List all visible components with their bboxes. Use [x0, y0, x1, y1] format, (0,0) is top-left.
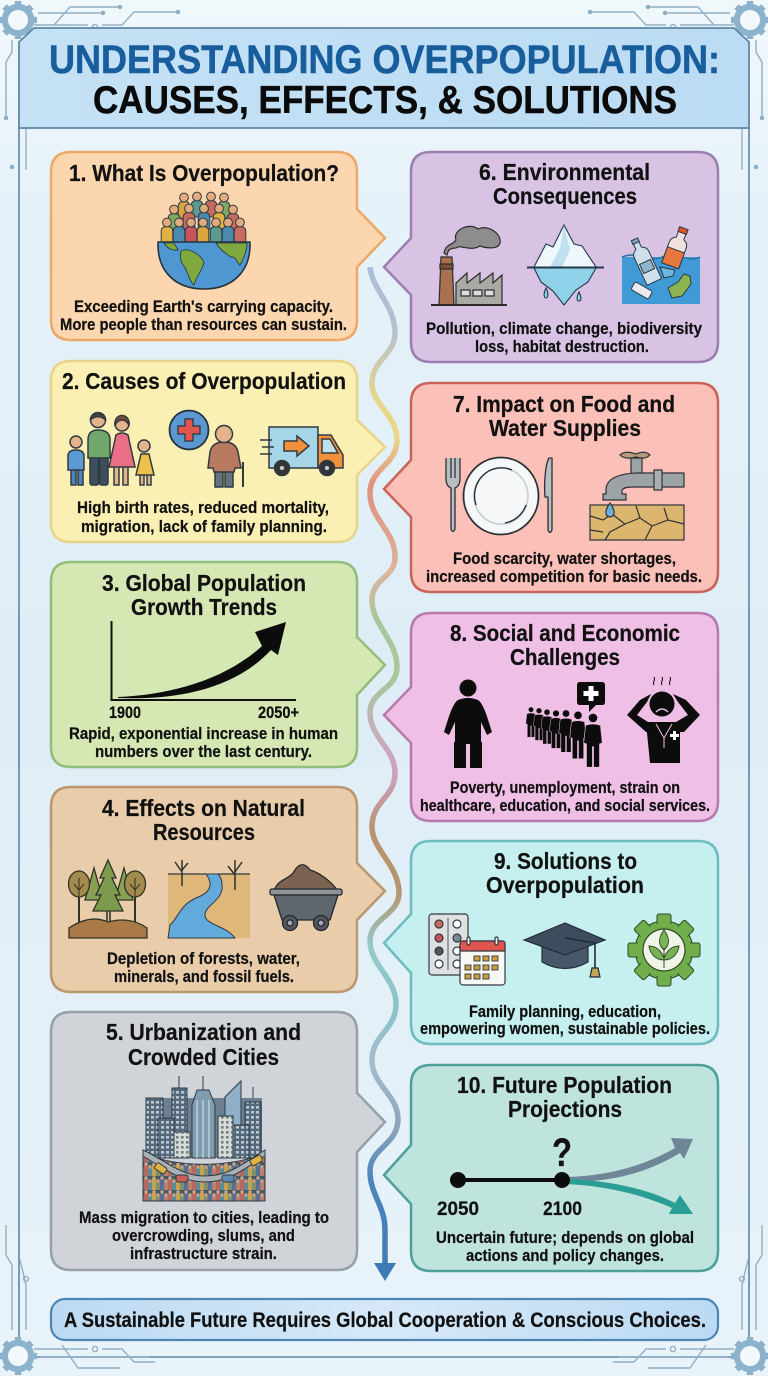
body text 3: Rapid, exponential increase in human [69, 724, 338, 743]
body text 7: increased competition for basic needs. [426, 567, 702, 586]
axis labels: 2050+ [258, 703, 299, 722]
heading 8: Challenges [510, 644, 620, 670]
heading 3 [102, 570, 306, 620]
title line 2: CAUSES, EFFECTS, & SOLUTIONS [93, 79, 677, 122]
body text 10: actions and policy changes. [466, 1246, 664, 1265]
body text 5: overcrowding, slums, and [112, 1226, 295, 1245]
body text 4: minerals, and fossil fuels. [114, 967, 294, 986]
timeline labels [437, 1199, 582, 1220]
heading 8 [450, 620, 680, 670]
panel 7: food and water [384, 383, 718, 592]
heading 4: 4. Effects on Natural [102, 795, 305, 821]
icon: fork, plate and knife [446, 458, 552, 534]
body text 10 [436, 1228, 694, 1265]
body text 9 [420, 1002, 710, 1038]
title banner [19, 28, 749, 128]
body text 7 [426, 549, 702, 586]
body text 10: Uncertain future; depends on global [436, 1228, 694, 1247]
timeline labels: 2100 [543, 1199, 582, 1220]
icon: crowded city [143, 1076, 265, 1201]
heading 8: 8. Social and Economic [450, 620, 680, 646]
icon: mine cart [270, 865, 342, 930]
body text 2 [77, 498, 329, 536]
body text 3: numbers over the last century. [95, 742, 312, 761]
heading 10 [457, 1072, 672, 1122]
heading 9: 9. Solutions to [494, 848, 637, 874]
panel 8: social and economic challenges [384, 613, 718, 821]
icon: crowd on globe [158, 192, 250, 289]
body text 5: infrastructure strain. [130, 1244, 277, 1263]
icon: stressed doctor [627, 677, 700, 763]
body text 6: loss, habitat destruction. [475, 337, 649, 356]
heading 2: 2. Causes of Overpopulation [62, 368, 346, 394]
icon: faucet over cracked ground [590, 452, 684, 540]
body text 4 [107, 949, 300, 986]
panel 2: causes [51, 361, 385, 542]
heading 9 [486, 848, 644, 898]
body text 1 [60, 297, 347, 334]
body text 3 [69, 724, 338, 761]
icon: forest [68, 860, 147, 938]
axis labels [109, 703, 299, 722]
panel 3: growth trends [51, 562, 385, 767]
icon: family [68, 412, 154, 485]
heading 5: 5. Urbanization and [106, 1019, 301, 1045]
heading 1: 1. What Is Overpopulation? [69, 160, 339, 186]
heading 5 [106, 1019, 301, 1070]
body text 7: Food scarcity, water shortages, [453, 549, 676, 568]
body text 8: healthcare, education, and social services. [420, 796, 710, 815]
heading 10: Projections [508, 1096, 622, 1122]
chart: projection timeline [437, 1131, 693, 1220]
heading 6 [479, 159, 650, 209]
heading 10: 10. Future Population [457, 1072, 672, 1098]
body text 1: More people than resources can sustain. [60, 315, 347, 334]
footer banner [51, 1299, 718, 1340]
icon: person with empty pockets [444, 680, 492, 768]
icon: elderly person [208, 426, 243, 487]
body text 5: Mass migration to cities, leading to [79, 1208, 329, 1227]
panel 10: future projections [384, 1065, 718, 1271]
icon: moving truck [260, 427, 343, 476]
panel 1: what is overpopulation [51, 152, 385, 340]
body text 2: High birth rates, reduced mortality, [77, 498, 329, 517]
body text 1: Exceeding Earth's carrying capacity. [74, 297, 333, 316]
icon: graduation cap [524, 923, 605, 977]
icon: factory with smoke [431, 226, 507, 305]
icon: pills and calendar [429, 914, 505, 985]
question mark: ? [552, 1131, 572, 1175]
icon: melting iceberg [527, 225, 604, 305]
body text 2: migration, lack of family planning. [81, 517, 327, 536]
heading 7: 7. Impact on Food and [453, 391, 675, 417]
heading 4: Resources [153, 819, 255, 845]
icon: queue at a clinic [526, 682, 605, 767]
body text 8 [420, 778, 710, 815]
body text 9: Family planning, education, [469, 1002, 661, 1021]
heading 3: Growth Trends [131, 594, 277, 620]
body text 6: Pollution, climate change, biodiversity [426, 319, 703, 338]
heading 7: Water Supplies [489, 415, 641, 441]
heading 9: Overpopulation [486, 872, 644, 898]
icon: plastic in the ocean [622, 225, 700, 304]
panel 6: environmental consequences [384, 152, 718, 362]
heading 6: Consequences [493, 183, 637, 209]
panel 9: solutions [384, 841, 718, 1044]
heading 7 [453, 391, 675, 441]
panel 5: urbanization [51, 1012, 385, 1270]
body text 9: empowering women, sustainable policies. [420, 1019, 710, 1038]
icon: shrinking river [168, 860, 250, 938]
central winding timeline arrow [370, 267, 399, 1281]
timeline labels: 2050 [437, 1199, 479, 1220]
body text 8: Poverty, unemployment, strain on [450, 778, 680, 797]
icon: medical cross [170, 410, 208, 450]
body text 6 [426, 319, 703, 356]
panel 4: natural resources [51, 787, 385, 992]
icon: sustainability gear [628, 914, 700, 986]
heading 4 [102, 795, 305, 845]
chart: exponential growth curve [109, 621, 299, 722]
heading 3: 3. Global Population [102, 570, 306, 596]
body text 4: Depletion of forests, water, [107, 949, 300, 968]
body text 5 [79, 1208, 329, 1263]
axis labels: 1900 [109, 703, 141, 722]
heading 5: Crowded Cities [128, 1044, 279, 1070]
heading 6: 6. Environmental [479, 159, 650, 185]
